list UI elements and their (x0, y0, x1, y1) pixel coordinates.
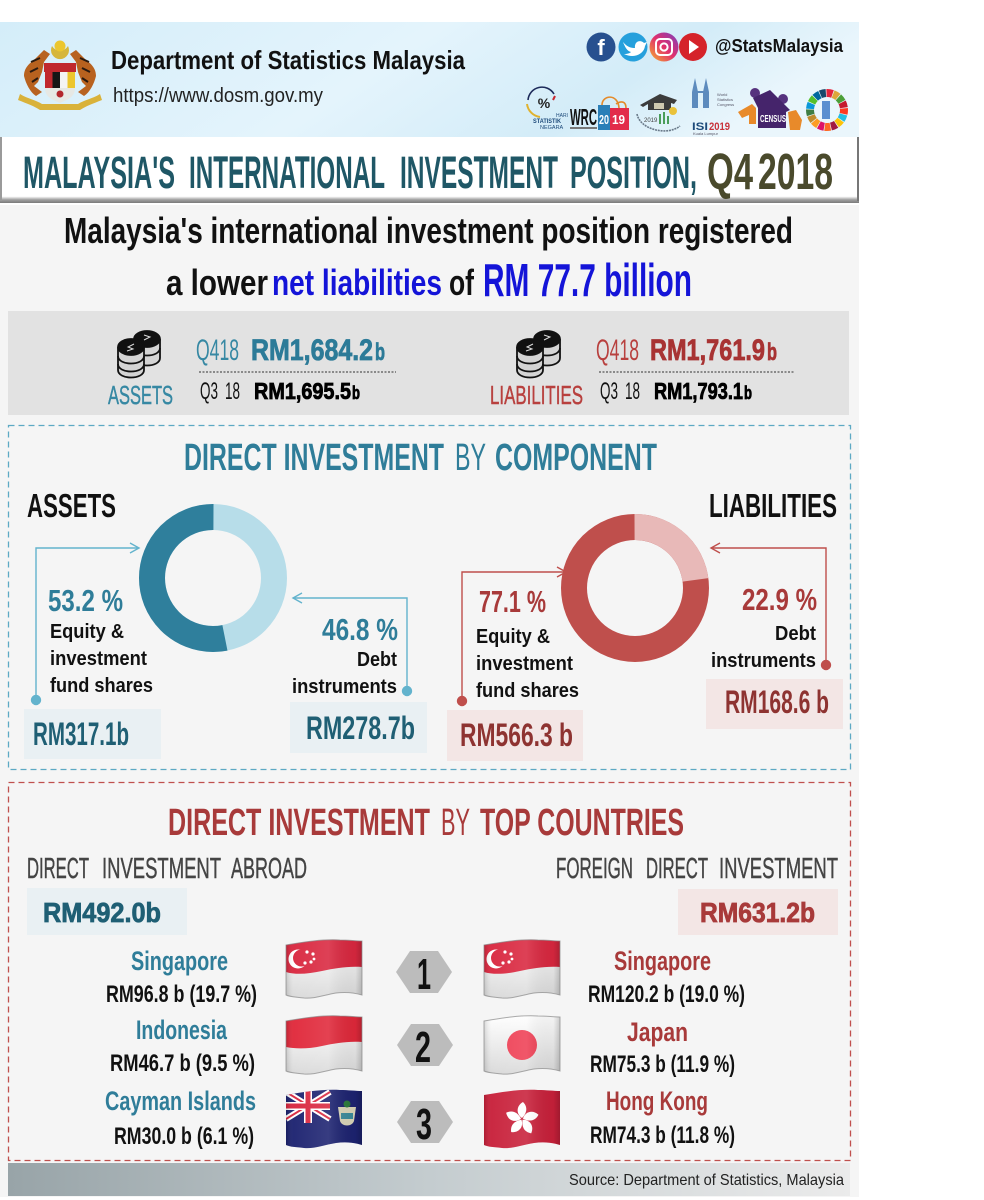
panel: direct investment by top countries (8, 782, 850, 1160)
assets equity share: investment (50, 648, 147, 670)
liabilities heading: LIABILITIES (709, 487, 837, 524)
liabilities debt share: instruments (711, 650, 816, 672)
assets Q3 value: b (352, 383, 360, 403)
logo: household survey: 2019 (644, 118, 658, 124)
assets debt share (292, 612, 398, 698)
rank badge 3 (397, 1100, 453, 1149)
liabilities Q3 value: 18 (625, 378, 640, 405)
direct investment abroad heading: DIRECT (27, 853, 89, 885)
logo: sustainable development goals wheel (810, 93, 844, 127)
rank badge 2: 2 (415, 1023, 431, 1072)
title period: Q4 (707, 143, 753, 200)
liabilities debt share: Debt (775, 623, 816, 645)
value box: assets debt (290, 702, 427, 753)
assets equity share: Equity & (50, 621, 124, 643)
liabilities Q4 value: b (767, 339, 777, 366)
assets Q4 value: Q418 (196, 334, 239, 367)
foreign rank 2: Japan: RM75.3 b (11.9 %) (590, 1051, 735, 1078)
footer source bar: Source: Department of Statistics, Malaysia (569, 1172, 844, 1189)
abroad rank 2: Indonesia: Indonesia (136, 1015, 228, 1045)
assets Q4 value (196, 334, 385, 367)
arrow: liabilities equity (458, 567, 566, 706)
headline: Malaysia's international investment position registered (64, 210, 793, 251)
logo: ISI 2019: Congress (717, 102, 734, 107)
header banner (0, 22, 859, 137)
foreign direct investment heading (556, 853, 838, 885)
logo: ISI 2019: Statistics (717, 97, 733, 102)
assets Q4 value: RM1,684.2 (251, 334, 373, 367)
liabilities Q4 value (596, 334, 777, 367)
logo: household survey (637, 94, 680, 131)
heading: BY (455, 437, 486, 479)
logo: Hari Statistik Negara: % (538, 95, 551, 111)
assets debt share: 46.8 % (322, 612, 398, 647)
value box: assets debt: RM278.7b (306, 710, 415, 746)
foreign rank 3: Hong Kong: RM74.3 b (11.8 %) (590, 1122, 735, 1149)
icon: facebook (586, 32, 616, 62)
rank badge 3: 3 (416, 1100, 432, 1149)
liabilities Q3 value (600, 378, 752, 405)
value box: assets equity: RM317.1b (33, 716, 129, 752)
foreign direct investment heading: FOREIGN (556, 853, 633, 885)
assets equity share (48, 583, 153, 697)
abroad rank 1: Singapore: RM96.8 b (19.7 %) (106, 981, 257, 1008)
assets Q3 value: 18 (225, 378, 240, 405)
foreign direct investment heading: DIRECT (646, 853, 708, 885)
title period: 2018 (758, 143, 833, 200)
heading: COMPONENT (495, 437, 657, 479)
liabilities Q3 value: Q3 (600, 378, 618, 405)
title text: INVESTMENT (400, 147, 558, 198)
assets Q3 value: Q3 (200, 378, 218, 405)
foreign rank 2: Japan (590, 1017, 735, 1078)
logo: WRC 2019: 20 (599, 112, 609, 127)
website: https://www.dosm.gov.my (113, 85, 323, 107)
page background (0, 205, 859, 1197)
headline: net liabilities (272, 262, 442, 303)
value box: liabilities debt (706, 679, 843, 729)
flag: Japan (484, 1015, 561, 1075)
heading: TOP COUNTRIES (480, 802, 684, 844)
donut chart: assets (152, 517, 274, 639)
icon: facebook: f (597, 35, 605, 60)
liabilities label: LIABILITIES (490, 380, 583, 410)
direct investment abroad heading: ABROAD (231, 853, 307, 885)
direct investment abroad heading: INVESTMENT (102, 853, 221, 885)
liabilities debt share (711, 582, 817, 672)
flag: Singapore right (484, 939, 561, 999)
foreign direct investment heading: INVESTMENT (719, 853, 838, 885)
liabilities Q4 value: RM1,761.9 (650, 334, 765, 367)
headline (64, 210, 793, 306)
logo: Hari Statistik Negara: NEGARA (540, 125, 564, 131)
logo: Hari Statistik Negara (527, 87, 568, 131)
abroad rank 3: Cayman Islands (105, 1086, 256, 1150)
logo: ISI 2019: 2019 (709, 121, 730, 133)
arrow: assets equity (32, 543, 139, 704)
total: abroad (27, 888, 187, 935)
icon: coat of arms (18, 40, 102, 110)
abroad rank 1: Singapore: Singapore (131, 946, 228, 976)
heading: DIRECT INVESTMENT (184, 437, 444, 479)
liabilities equity share: 77.1 % (479, 584, 546, 619)
liabilities equity share: fund shares (476, 680, 579, 702)
assets Q3 value (200, 378, 360, 405)
liabilities equity share: investment (476, 653, 573, 675)
flag: Indonesia (286, 1015, 363, 1075)
foreign rank 1: Singapore: RM120.2 b (19.0 %) (588, 981, 745, 1008)
flag: Cayman Islands (286, 1089, 363, 1149)
abroad rank 2: Indonesia: RM46.7 b (9.5 %) (110, 1050, 255, 1077)
logo: ISI 2019: ISI (692, 121, 708, 133)
assets label: ASSETS (108, 380, 173, 410)
abroad rank 1: Singapore (106, 946, 257, 1008)
liabilities debt share: 22.9 % (742, 582, 817, 617)
foreign rank 2: Japan: Japan (627, 1017, 688, 1047)
title band (0, 137, 859, 203)
title period (707, 143, 833, 200)
total: foreign: RM631.2b (700, 897, 815, 928)
rank badge 1: 1 (417, 950, 431, 999)
foreign rank 1: Singapore (588, 946, 745, 1008)
foreign rank 3: Hong Kong: Hong Kong (606, 1086, 708, 1116)
liabilities Q3 value: RM1,793.1 (654, 378, 743, 404)
title text: MALAYSIA'S (23, 147, 175, 198)
icon: coins liabilities (517, 331, 560, 378)
logo: census 2020: CENSUS (760, 114, 786, 125)
logo: ISI 2019 (692, 78, 734, 136)
donut chart: liabilities (574, 527, 696, 649)
logo: Hari Statistik Negara: HARI (556, 113, 568, 119)
value box: liabilities equity (447, 710, 583, 761)
heading: BY (441, 802, 470, 844)
assets Q4 value: b (375, 339, 385, 366)
title text: INTERNATIONAL (189, 147, 385, 198)
assets debt share: instruments (292, 676, 397, 698)
logo: Hari Statistik Negara: STATISTIK (533, 119, 562, 125)
liabilities equity share: Equity & (476, 626, 550, 648)
logo: census 2020 (738, 88, 802, 130)
panel: direct investment by component (8, 426, 850, 770)
flag: Singapore left (286, 939, 363, 999)
logo: ISI 2019: World (717, 92, 727, 97)
logo: WRC 2019: 19 (612, 112, 625, 127)
organisation name: Department of Statistics Malaysia (111, 45, 465, 75)
assets Q3 value: RM1,695.5 (254, 378, 351, 404)
abroad rank 3: Cayman Islands: RM30.0 b (6.1 %) (114, 1123, 254, 1150)
icon: twitter (618, 32, 648, 62)
foreign rank 1: Singapore: Singapore (614, 946, 711, 976)
total: foreign (678, 889, 838, 935)
assets equity share: fund shares (50, 675, 153, 697)
logo: ISI 2019: Kuala Lumpur (693, 131, 719, 136)
social handle: @StatsMalaysia (715, 36, 844, 56)
assets equity share: 53.2 % (48, 583, 123, 618)
assets heading: ASSETS (27, 487, 116, 524)
headline: RM 77.7 billion (483, 254, 692, 306)
liabilities Q4 value: Q418 (596, 334, 639, 367)
icon: coins assets (118, 331, 160, 378)
icon: youtube (679, 33, 707, 61)
panel: summary assets and liabilities (8, 311, 849, 415)
title text: POSITION, (570, 147, 697, 198)
value box: liabilities debt: RM168.6 b (725, 684, 829, 720)
liabilities equity share (476, 584, 579, 702)
direct investment abroad heading (27, 853, 307, 885)
flag: Hong Kong (484, 1089, 561, 1149)
arrow: liabilities debt (711, 543, 830, 670)
abroad rank 2: Indonesia (110, 1015, 255, 1077)
headline: of (449, 262, 475, 303)
foreign rank 3: Hong Kong (590, 1086, 735, 1149)
arrow: assets debt (293, 593, 412, 696)
headline: a lower (166, 262, 268, 303)
value box: assets equity (24, 709, 161, 759)
heading: DIRECT INVESTMENT (168, 802, 430, 844)
assets debt share: Debt (357, 649, 397, 671)
total: abroad: RM492.0b (43, 897, 161, 928)
icon: instagram (650, 32, 678, 62)
logo: WRC 2019: WRC (570, 104, 597, 130)
liabilities Q3 value: b (744, 383, 752, 403)
title text (23, 147, 697, 198)
abroad rank 3: Cayman Islands: Cayman Islands (105, 1086, 256, 1116)
rank badge 1 (396, 950, 452, 999)
rank badge 2 (397, 1023, 453, 1072)
footer source bar (8, 1163, 850, 1196)
value box: liabilities equity: RM566.3 b (460, 717, 573, 753)
